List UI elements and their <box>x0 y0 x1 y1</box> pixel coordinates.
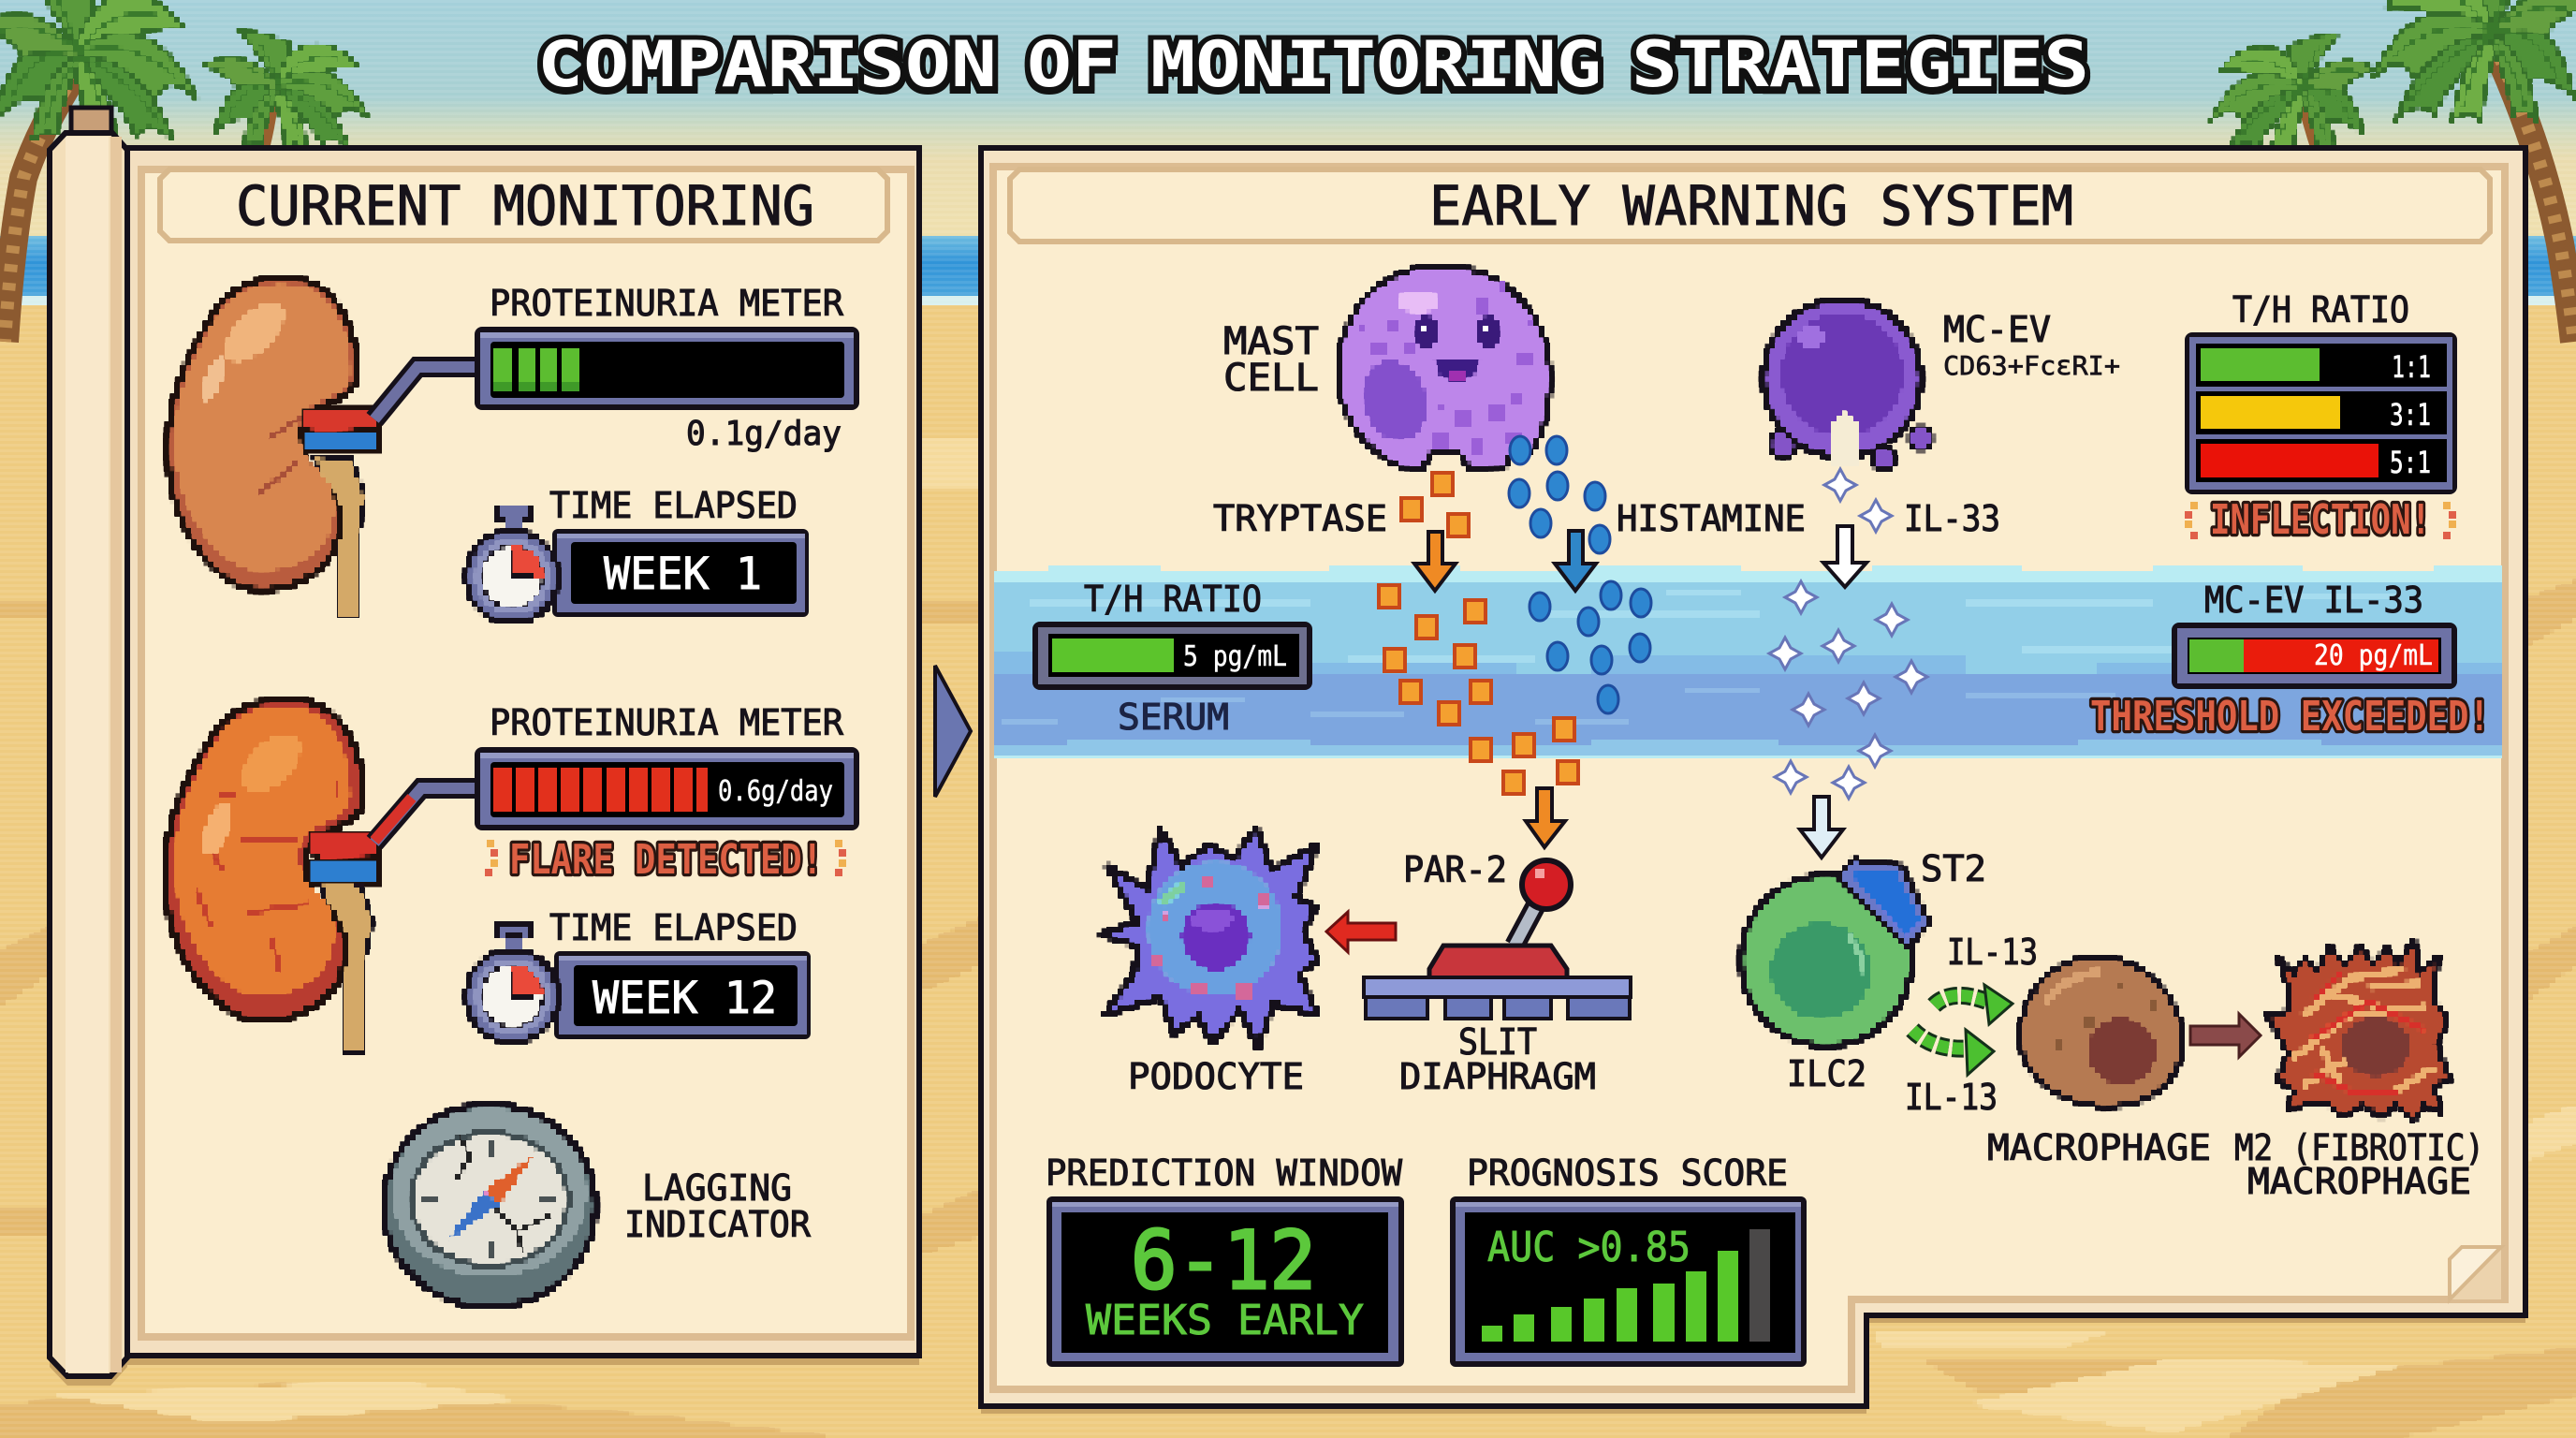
title: STRATEGIES <box>1632 28 2089 102</box>
label: mast cell: MAST <box>1223 320 1319 363</box>
label: MC-EV <box>1943 309 2120 381</box>
icon: ILC2 with ST2 receptor <box>1741 859 1929 1046</box>
label: slit diaphragm: DIAPHRAGM <box>1399 1056 1596 1097</box>
label: M2 fibrotic macrophage <box>2234 1127 2484 1202</box>
label: T/H ratio upper: T/H RATIO <box>2232 289 2409 330</box>
gauge: MC-EV IL-33: 20 pg/mL <box>2314 639 2433 672</box>
histamine particles <box>1509 436 1651 713</box>
label: podocyte: PODOCYTE <box>1128 1056 1304 1097</box>
label: MC-EV IL-33: MC-EV IL-33 <box>2204 580 2423 621</box>
icon: PAR-2 joystick on slit diaphragm <box>1364 860 1631 1019</box>
label: time elapsed 2: TIME ELAPSED <box>549 907 798 948</box>
display: prediction window: 6-12 <box>1131 1214 1316 1308</box>
title: COMPARISON <box>537 28 997 102</box>
alert: threshold exceeded: THRESHOLD EXCEEDED! <box>2090 693 2490 741</box>
label: macrophage: MACROPHAGE <box>1987 1127 2211 1168</box>
meter: proteinuria low <box>374 327 859 419</box>
icon: stopwatch 2 <box>466 925 558 1042</box>
arrow: IL-33 down <box>1823 526 1866 587</box>
palm trees <box>0 0 2576 342</box>
icon: M2 fibrotic macrophage <box>2267 940 2450 1120</box>
panel: early warning system <box>981 148 2525 1414</box>
label: MC-EV: CD63+FcεRI+ <box>1943 350 2120 381</box>
gauge: T/H ratio levels: 5:1 <box>2390 445 2431 480</box>
heading: early warning system <box>1010 169 2490 242</box>
alert: flare detected: FLARE DETECTED! <box>509 836 823 884</box>
label: prediction window: PREDICTION WINDOW <box>1046 1152 1402 1194</box>
label: lagging indicator: LAGGING <box>642 1167 792 1209</box>
label: mast cell: CELL <box>1223 357 1319 400</box>
arrows: IL-13 to macrophage <box>1912 985 2012 1075</box>
timer: week 12 <box>554 951 811 1039</box>
label: mast cell <box>1223 320 1319 400</box>
label: serum: SERUM <box>1118 697 1229 738</box>
gauge: serum T/H ratio: 5 pg/mL <box>1183 640 1287 673</box>
gauge: T/H ratio levels: 3:1 <box>2390 397 2431 433</box>
arrow: macrophage to M2 <box>2190 1014 2261 1057</box>
label: PAR-2: PAR-2 <box>1403 849 1507 890</box>
gauge: serum T/H ratio <box>1032 622 1312 690</box>
timer: week 1 <box>552 529 809 617</box>
arrow: IL-33 to ST2 <box>1800 797 1843 858</box>
label: prognosis score: PROGNOSIS SCORE <box>1467 1152 1788 1194</box>
timer: week 12: WEEK 12 <box>593 973 777 1024</box>
arrow: between panels <box>935 666 971 797</box>
label: M2 fibrotic macrophage: M2 (FIBROTIC) <box>2234 1127 2484 1168</box>
icon: healthy kidney <box>168 278 379 617</box>
label: IL-13 upper: IL-13 <box>1947 932 2038 973</box>
timer: week 1: WEEK 1 <box>604 549 762 600</box>
label: ST2: ST2 <box>1921 848 1986 889</box>
label: histamine: HISTAMINE <box>1617 498 1806 539</box>
display: prediction window <box>1046 1196 1404 1367</box>
label: lagging indicator <box>624 1167 811 1245</box>
arrow: to podocyte <box>1326 912 1396 952</box>
IL-33 particles <box>1769 469 1927 799</box>
label: IL-13 lower: IL-13 <box>1905 1077 1998 1118</box>
value: 0.1g/day: 0.1g/day <box>686 415 842 453</box>
arrow: histamine down <box>1555 531 1596 591</box>
icon: podocyte <box>1102 828 1317 1048</box>
icon: macrophage <box>2020 957 2183 1107</box>
icon: MC-EV vesicle <box>1764 300 1932 470</box>
heading: early warning system: EARLY WARNING SYSTEM <box>1429 174 2073 238</box>
alert: inflection: INFLECTION! <box>2210 496 2431 544</box>
display: prediction window: WEEKS EARLY <box>1086 1297 1364 1344</box>
panel: current monitoring <box>50 108 919 1386</box>
icon: mast cell <box>1339 266 1550 468</box>
label: IL-33: IL-33 <box>1904 498 2000 539</box>
label: lagging indicator: INDICATOR <box>624 1204 811 1245</box>
label: M2 fibrotic macrophage: MACROPHAGE <box>2247 1161 2471 1202</box>
title <box>537 28 2089 102</box>
meter: proteinuria high <box>374 747 859 843</box>
display: prognosis score <box>1450 1196 1807 1367</box>
gauge: MC-EV IL-33 <box>2172 623 2457 689</box>
title: MONITORING <box>1150 28 1602 102</box>
meter: proteinuria high: 0.6g/day <box>718 775 833 808</box>
label: ILC2: ILC2 <box>1787 1053 1866 1094</box>
heading: current monitoring: CURRENT MONITORING <box>236 174 814 238</box>
serum band <box>994 565 2502 758</box>
label: tryptase: TRYPTASE <box>1213 498 1387 539</box>
icon: cracked compass <box>384 1105 595 1307</box>
bar chart: score bars <box>1482 1229 1770 1342</box>
label: proteinuria meter 1: PROTEINURIA METER <box>490 283 843 324</box>
gauge: T/H ratio levels <box>2185 332 2457 494</box>
label: slit diaphragm: SLIT <box>1458 1021 1537 1063</box>
tryptase particles <box>1379 473 1578 794</box>
icon: stopwatch 1 <box>466 506 558 623</box>
display: prognosis score: AUC >0.85 <box>1487 1224 1690 1271</box>
title: OF <box>1027 28 1117 102</box>
label: time elapsed 1: TIME ELAPSED <box>549 485 798 526</box>
label: T/H ratio serum: T/H RATIO <box>1084 579 1262 620</box>
label: slit diaphragm <box>1399 1021 1596 1097</box>
label: proteinuria meter 2: PROTEINURIA METER <box>490 702 843 743</box>
arrow: tryptase down <box>1414 532 1456 591</box>
label: MC-EV: MC-EV <box>1943 309 2051 350</box>
arrow: tryptase to PAR-2 <box>1526 788 1565 847</box>
corner fold <box>2450 1247 2501 1299</box>
gauge: T/H ratio levels: 1:1 <box>2392 349 2431 385</box>
icon: inflamed kidney <box>165 699 379 1051</box>
